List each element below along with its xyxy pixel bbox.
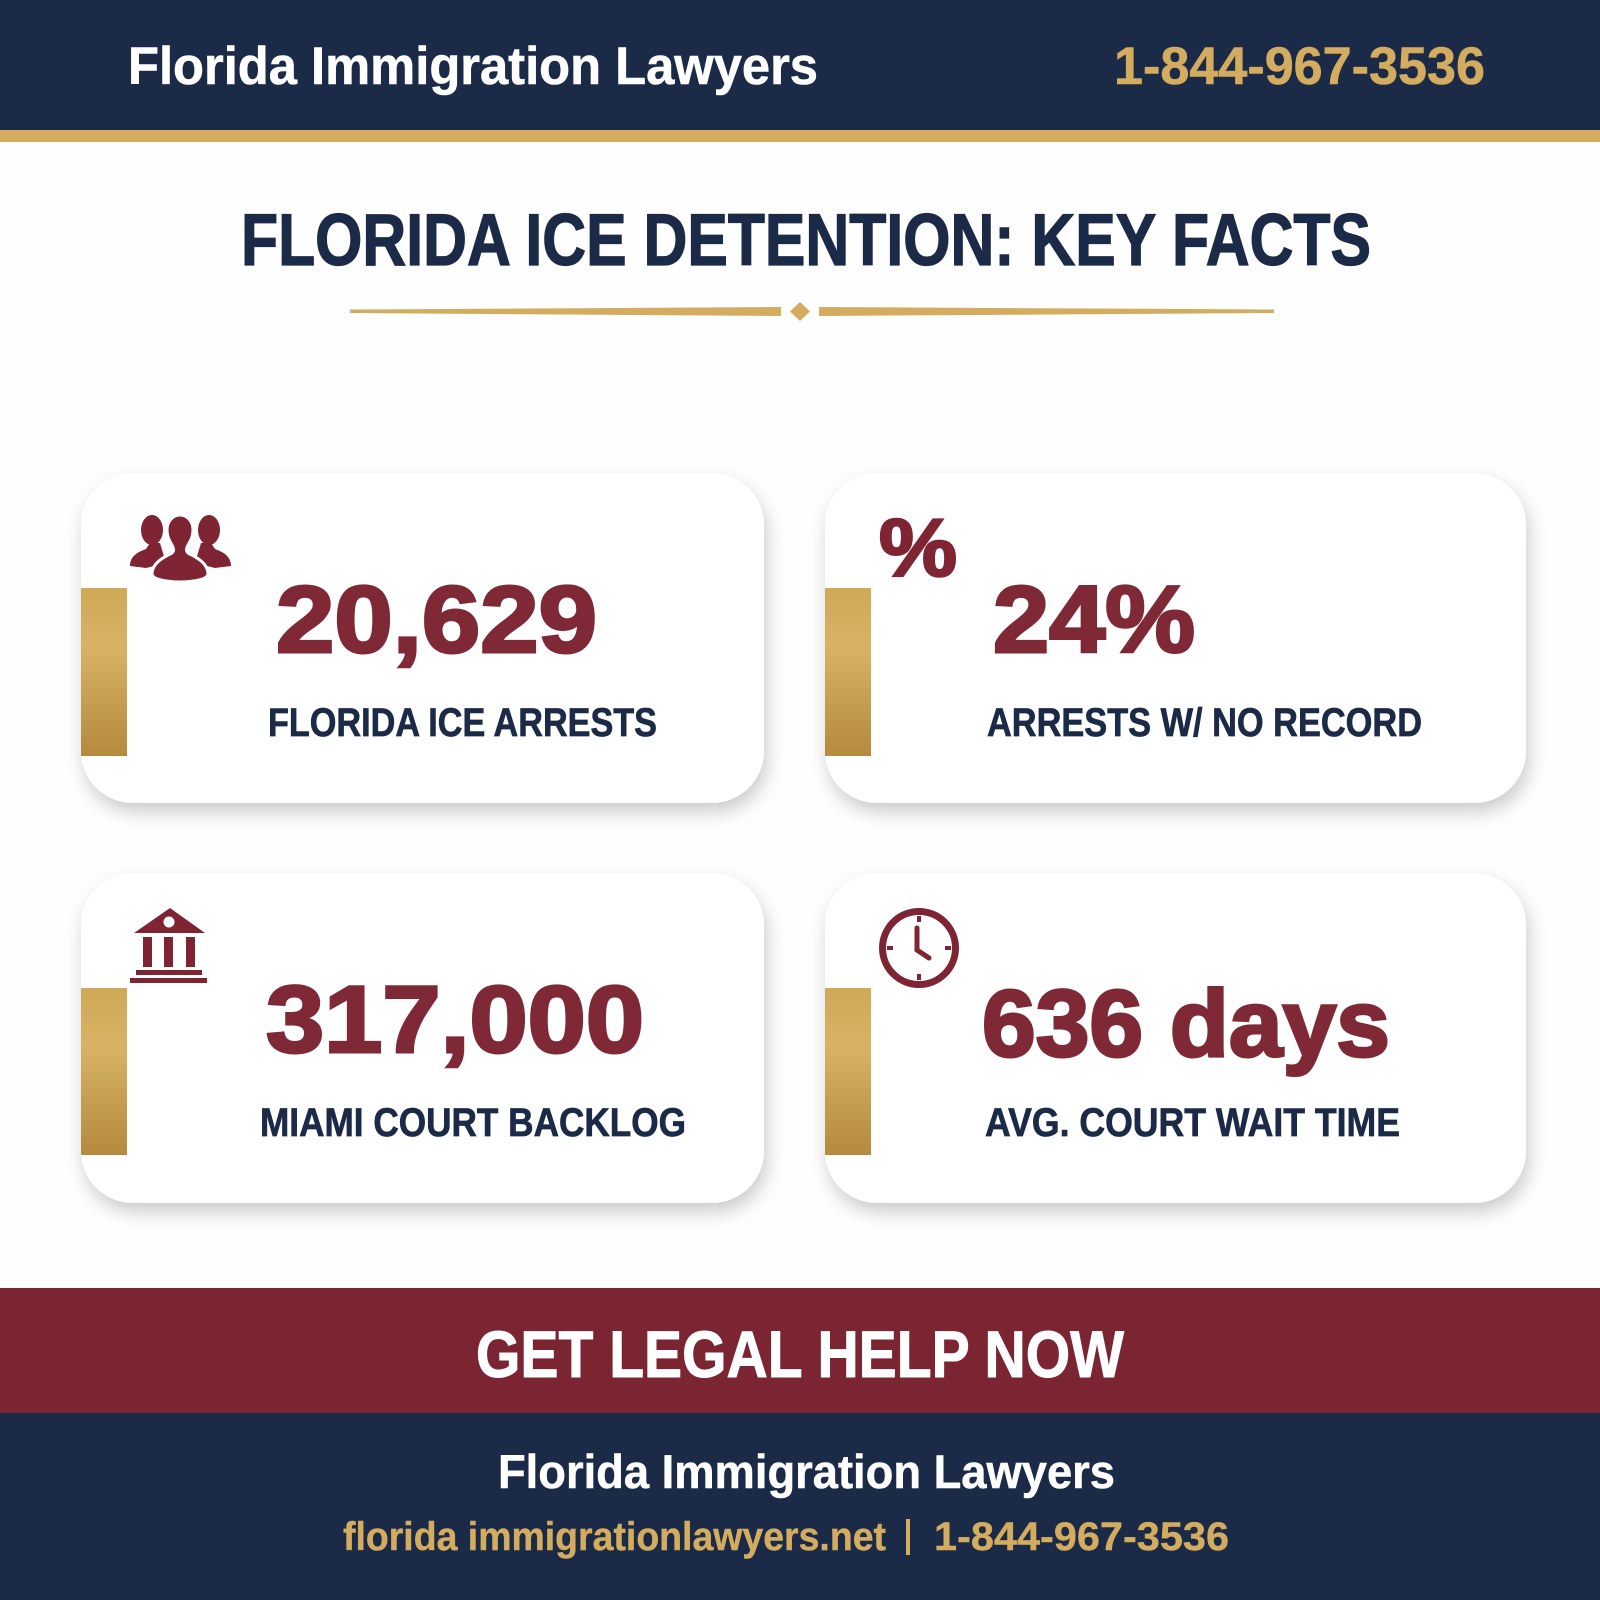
- icon: clock: [882, 912, 956, 984]
- header bar: [0, 0, 1600, 142]
- icon: courthouse: [130, 908, 207, 983]
- panel: Florida ICE arrests: [81, 473, 764, 803]
- panel: average court wait time: [825, 873, 1526, 1203]
- panel: Miami court backlog: [81, 873, 764, 1203]
- title: FLORIDA ICE DETENTION: KEY FACTS: [241, 200, 1371, 281]
- footer: [0, 1413, 1600, 1600]
- footer: Florida Immigration Lawyers: [498, 1445, 1115, 1498]
- call to action banner: [0, 1288, 1600, 1414]
- stat: 24%: 24%: [993, 567, 1195, 673]
- stat: 317,000: 317,000: [266, 967, 644, 1073]
- header bar: 1-844-967-3536: [1114, 37, 1485, 96]
- footer: florida immigrationlawyers.net: [343, 1515, 886, 1559]
- label: Florida ICE arrests: FLORIDA ICE ARRESTS: [268, 701, 657, 745]
- stat: 636 days: 636 days: [982, 971, 1390, 1077]
- panel: arrests with no record: [825, 473, 1526, 803]
- header bar: Florida Immigration Lawyers: [128, 37, 818, 96]
- icon: people: [130, 515, 231, 582]
- title divider: [350, 302, 1274, 321]
- stat: 20,629: 20,629: [276, 567, 597, 673]
- call to action banner: GET LEGAL HELP NOW: [476, 1317, 1125, 1391]
- label: average court wait time: AVG. COURT WAIT TIME: [985, 1101, 1400, 1145]
- label: arrests with no record: ARRESTS W/ NO RECORD: [987, 701, 1422, 745]
- footer: 1-844-967-3536: [934, 1515, 1229, 1559]
- icon: percent: %: [879, 503, 957, 594]
- label: Miami court backlog: MIAMI COURT BACKLOG: [260, 1101, 686, 1145]
